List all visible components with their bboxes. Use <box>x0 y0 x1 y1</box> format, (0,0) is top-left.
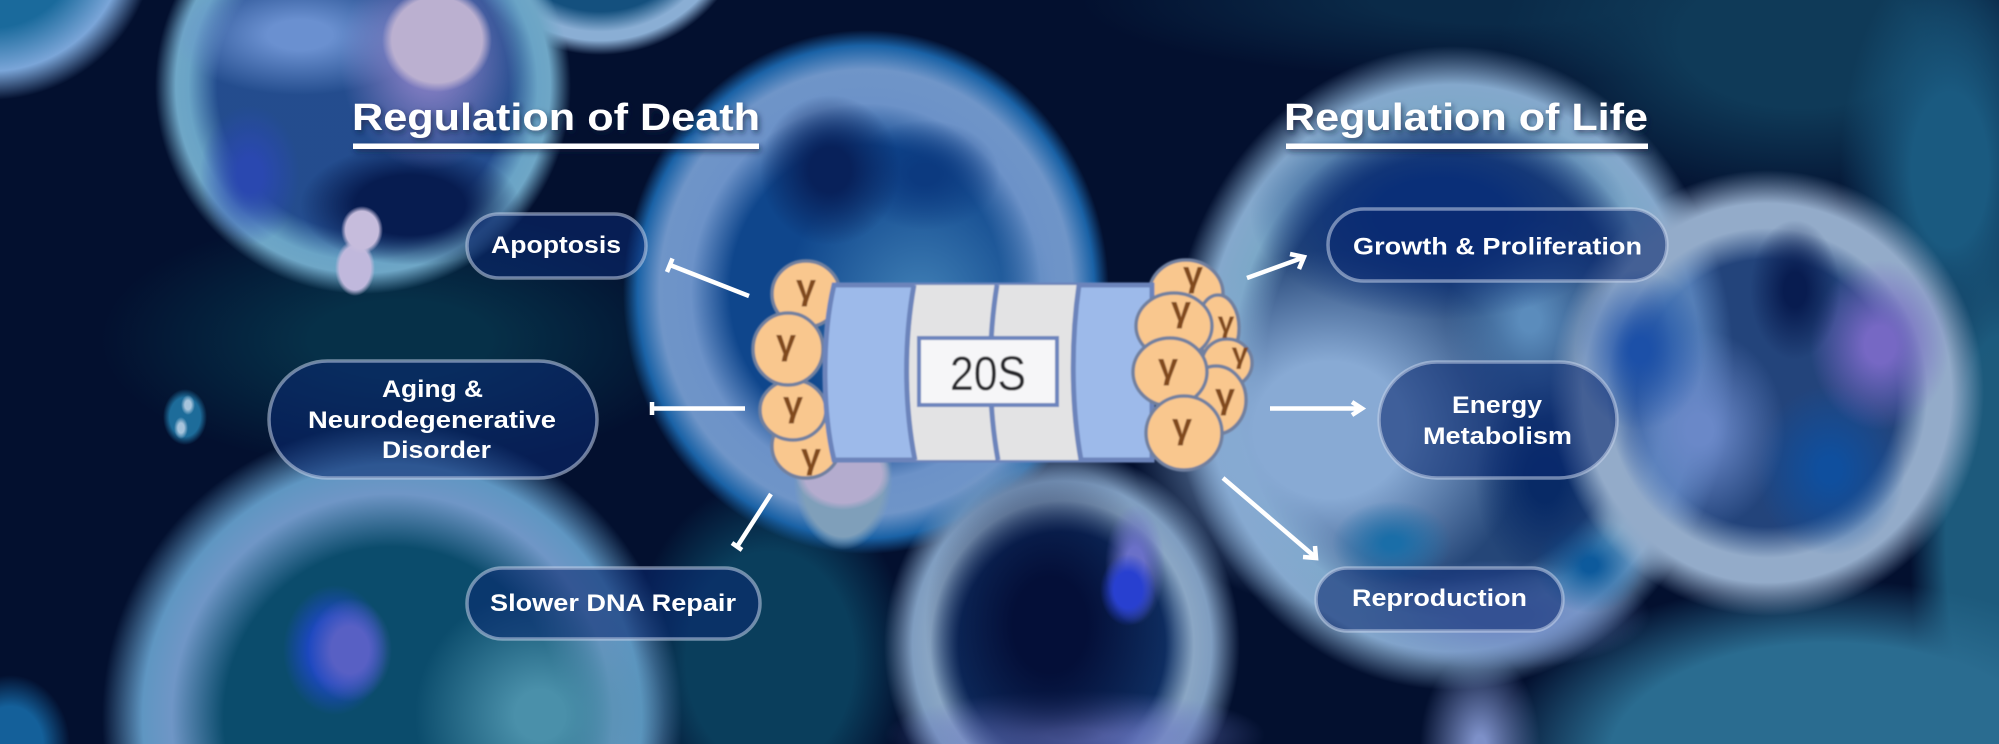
pill: Aging & Neurodegenerative Disorder: Aging & <box>382 376 483 403</box>
pill: Growth & Proliferation <box>1328 209 1667 281</box>
arrow: to Reproduction <box>1223 478 1316 558</box>
right back gamma subunits: γ <box>1183 253 1203 294</box>
pill: Apoptosis <box>467 214 646 278</box>
right back gamma subunits: γ <box>1215 375 1235 416</box>
right front gamma subunits: γ <box>1172 405 1192 446</box>
right front gamma subunits: γ <box>1171 288 1191 329</box>
arrow: to Growth <box>1247 254 1304 278</box>
pill: Energy Metabolism: Metabolism <box>1423 423 1572 450</box>
inhibition arrow: to Apoptosis <box>667 258 749 296</box>
cylinder body <box>825 285 1152 460</box>
right front gamma subunits <box>1133 288 1222 470</box>
right back gamma subunits <box>1149 253 1252 434</box>
left gamma subunits: γ <box>783 383 803 424</box>
pill: Slower DNA Repair: Slower DNA Repair <box>490 590 736 617</box>
inhibition arrow: to Slower DNA Repair <box>732 494 771 550</box>
arrow: to Energy <box>1270 402 1362 415</box>
20S label <box>919 338 1057 405</box>
heading: Regulation of Death: Regulation of Death <box>352 97 760 139</box>
right front gamma subunits: γ <box>1158 345 1178 386</box>
right back gamma subunits: γ <box>1218 306 1235 339</box>
pill: Apoptosis: Apoptosis <box>491 232 621 259</box>
left gamma subunits: γ <box>776 321 796 362</box>
left gamma subunits <box>753 261 840 478</box>
inhibition arrow: to Aging <box>652 402 745 415</box>
pill: Reproduction <box>1316 568 1563 631</box>
pill: Reproduction: Reproduction <box>1352 585 1527 612</box>
left gamma subunits: γ <box>801 435 821 476</box>
heading: Regulation of Life: Regulation of Life <box>1284 97 1648 139</box>
pill: Energy Metabolism <box>1379 362 1617 478</box>
20S label: 20S <box>950 348 1026 401</box>
20S proteasome diagram <box>753 253 1252 478</box>
pill: Aging & Neurodegenerative Disorder: Disorder <box>382 437 491 464</box>
left gamma subunits: γ <box>796 266 816 307</box>
pill: Growth & Proliferation: Growth & Proliferation <box>1353 234 1642 260</box>
pill: Energy Metabolism: Energy <box>1452 392 1543 419</box>
pill: Aging & Neurodegenerative Disorder: Neurodegenerative <box>308 407 556 434</box>
pill: Slower DNA Repair <box>467 568 760 639</box>
pill: Aging & Neurodegenerative Disorder <box>269 361 597 478</box>
right back gamma subunits: γ <box>1232 337 1249 370</box>
